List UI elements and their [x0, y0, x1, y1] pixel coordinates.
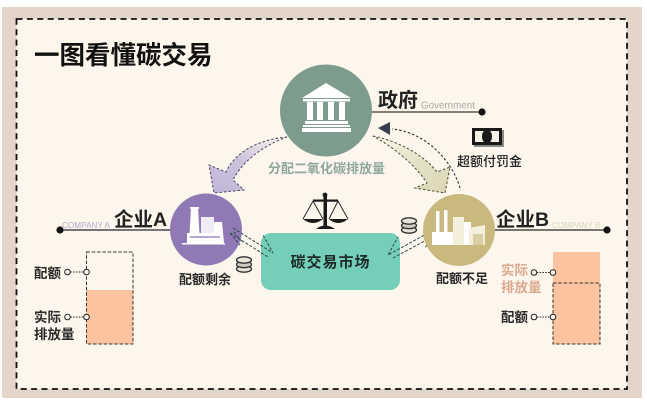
company B heading: 企业B [496, 208, 549, 231]
arrows: company B to market [388, 233, 432, 258]
icon: scales [303, 193, 348, 229]
chart: company B quota bar [531, 252, 600, 344]
icon: coins A [236, 257, 252, 272]
arrows: company A to market [230, 228, 273, 257]
label: A quota: 配额 [34, 266, 61, 281]
company A connector line [56, 226, 172, 234]
arrow: allocation to company B [373, 136, 450, 193]
label: B actual emissions: 实际 [501, 262, 528, 278]
company B english label: COMPANY B [552, 221, 601, 230]
government heading: 政府 [378, 88, 418, 112]
icon: banknote [472, 128, 504, 147]
icon: coins B [402, 218, 416, 233]
company A english label: COMPANY A [62, 221, 110, 230]
label: B quota: 配额 [501, 310, 528, 325]
panel: carbon market: 碳交易市场 [290, 253, 371, 271]
label: B actual emissions [501, 262, 542, 295]
label: A actual emissions: 实际 [34, 309, 61, 325]
label: quota surplus: 配额剩余 [179, 272, 231, 287]
label: A actual emissions [34, 309, 74, 342]
allocation label: 分配二氧化碳排放量 [268, 161, 385, 176]
company A heading: 企业A [114, 208, 167, 231]
icon: government building [280, 64, 372, 156]
title: 一图看懂碳交易 [34, 42, 213, 70]
government english label: Government [421, 100, 475, 112]
penalty label: 超额付罚金 [457, 154, 522, 169]
label: B actual emissions: 排放量 [501, 279, 542, 295]
label: quota shortfall: 配额不足 [436, 271, 488, 286]
arrow: allocation to company A [209, 137, 287, 193]
icon: company A factory [170, 194, 242, 266]
panel: carbon market [261, 233, 400, 290]
chart: company A quota bar [65, 252, 133, 344]
government connector line [372, 108, 486, 116]
arrow: excess penalty to government [378, 122, 460, 188]
icon: company B factory [423, 194, 495, 266]
label: A actual emissions: 排放量 [34, 326, 74, 342]
company B connector line [495, 226, 611, 234]
